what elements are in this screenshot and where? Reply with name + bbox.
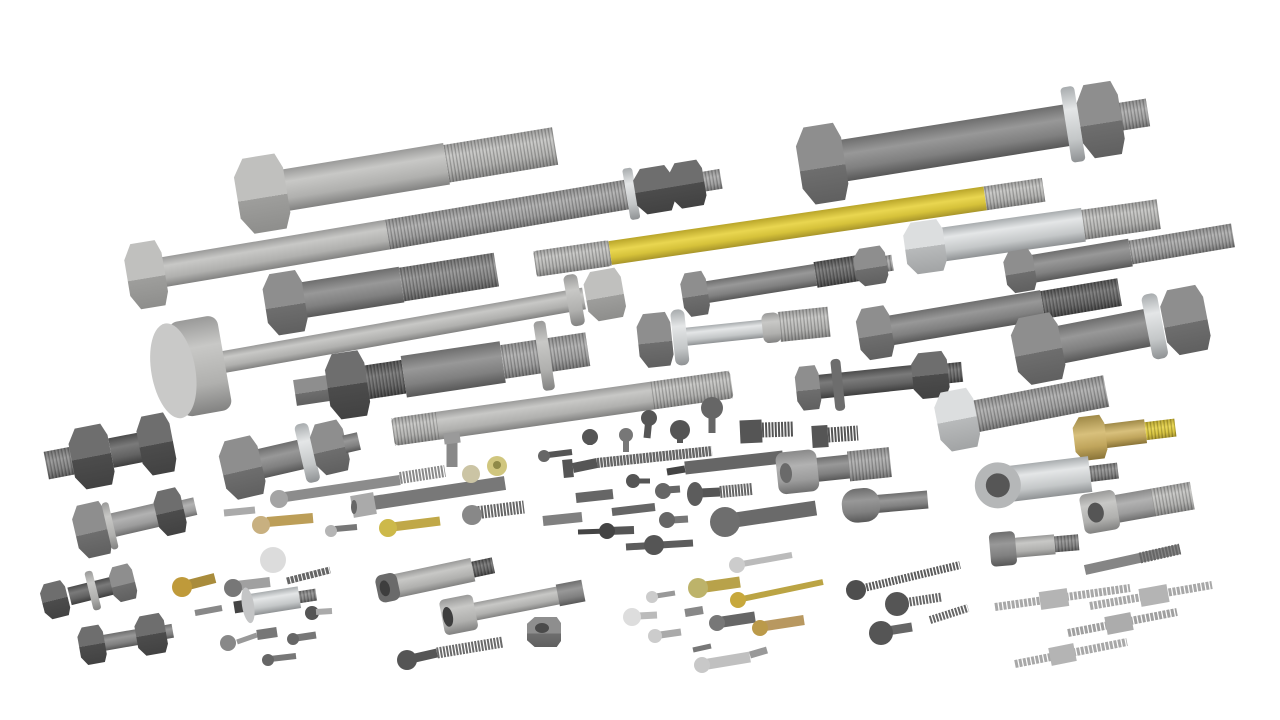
bolt: grey set, lower left 2 [69, 480, 201, 560]
rod: long silver stud [391, 371, 734, 446]
screw: socket cap pair [740, 429, 858, 437]
nut: pale [462, 465, 480, 483]
bolt: dark set, lower left 1 [40, 411, 179, 496]
bolt: grey domed head [462, 505, 524, 525]
rod: yellow coated threaded rod [533, 177, 1045, 277]
screw: socket head rod [351, 483, 505, 514]
bolt: dark set, lower left 3 [38, 561, 139, 623]
bolt: medium bolt with nut [679, 241, 896, 318]
nut: grey hex nut [527, 617, 561, 647]
bolt: dark set, lower left 4 [76, 611, 176, 667]
bolt: splined short bolt [989, 525, 1080, 567]
bolt: socket shoulder right [1079, 476, 1196, 535]
bolt: silver fully threaded bolt [932, 362, 1112, 453]
bolt: long bolt with two dark nuts [122, 146, 726, 311]
bolt: large dark bolt, top right [793, 74, 1154, 206]
screws: centre cluster [538, 450, 783, 555]
bolt: waisted flange bolt [635, 294, 832, 370]
socket screw: standing above nuts [444, 437, 460, 467]
bolt: grey bolt far right [1002, 215, 1237, 294]
screw: splined thin bolt [1085, 549, 1180, 570]
anchors: wedge anchor group [995, 585, 1212, 664]
bolt: short bolt with washer and nut [216, 412, 366, 502]
bolt: spline head silver [972, 448, 1121, 511]
bolt: brass shoulder bolt [1071, 406, 1178, 462]
bolt: domed screw [710, 507, 816, 537]
bolt: long socket cap screw [439, 573, 587, 636]
bolt: grey bolt with dark thread, left [260, 239, 501, 337]
bolt: grey bolt dark thread right [854, 266, 1124, 361]
bolt: large silver hex bolt, top left [231, 109, 561, 236]
bolt: double thread stud with nut and washer [290, 315, 593, 428]
screws: dark lower right cluster [846, 565, 968, 645]
bolt: socket head large [775, 441, 893, 495]
bolt: socket shoulder screw [374, 552, 496, 604]
screws: lower centre cluster [623, 555, 823, 673]
bolt: domed grey plug [841, 483, 929, 524]
bolt: bright silver bolt right [902, 188, 1162, 276]
nut: yellow [487, 456, 507, 476]
screw: dark long screw [397, 642, 503, 670]
bolt: short heavy bolt with washer and nut [1008, 283, 1213, 387]
screw: long thin flange screw [270, 471, 445, 508]
bolt: dark flanged bolt with nut [793, 346, 965, 415]
bolt: cylinder head long shaft [143, 244, 632, 422]
screws: small left cluster [172, 510, 440, 666]
bolt: silver flanged shoulder bolt [231, 577, 319, 625]
screws: top small standing group [582, 397, 723, 452]
